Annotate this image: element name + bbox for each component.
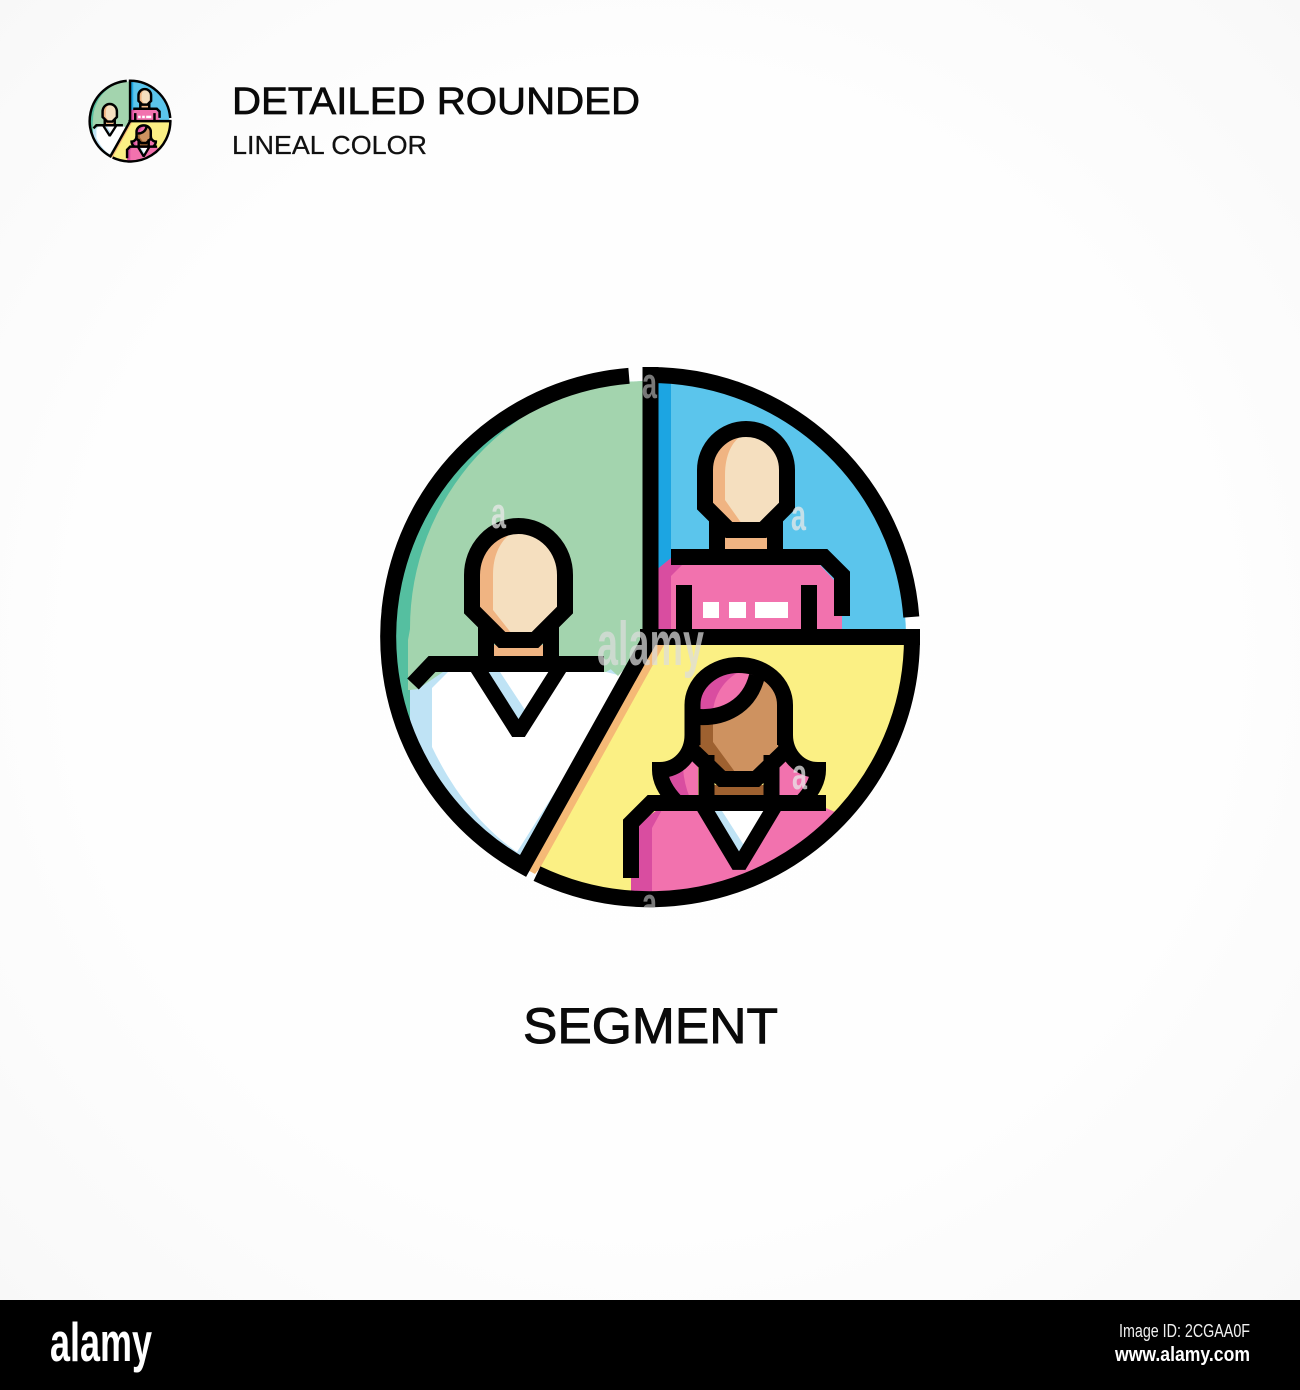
watermark: small marks: a — [491, 489, 506, 538]
subheading: lineal color: LINEAL COLOR — [232, 130, 427, 160]
footer image id: Image ID: 2CGAA0F — [1119, 1321, 1250, 1341]
icon: small header copy of the pie — [88, 80, 172, 164]
person: left figure — [413, 526, 604, 733]
person: top-right figure — [650, 429, 842, 637]
watermark: alamy center: alamy — [597, 610, 704, 679]
title: segment: SEGMENT — [523, 998, 778, 1054]
segment: green and white left background — [380, 367, 652, 875]
segment: yellow bottom-right background — [500, 637, 920, 907]
pie divider lines — [640, 367, 920, 645]
watermark: small marks: a — [791, 491, 806, 540]
watermark: small marks: a — [642, 879, 657, 928]
watermark: small marks — [491, 359, 807, 928]
footer website: www.alamy.com — [1114, 1344, 1250, 1366]
heading: detailed rounded: DETAILED ROUNDED — [232, 81, 640, 123]
footer logo: alamy: alamy — [50, 1311, 152, 1373]
footer bar — [0, 1300, 1300, 1390]
watermark: small marks: a — [642, 359, 657, 408]
segment: blue top-right background — [650, 367, 920, 637]
watermark: small marks: a — [792, 750, 807, 799]
pie outer ring — [388, 375, 912, 899]
person: bottom-right woman — [631, 662, 910, 915]
main icon: segmented pie with three people — [380, 367, 920, 915]
